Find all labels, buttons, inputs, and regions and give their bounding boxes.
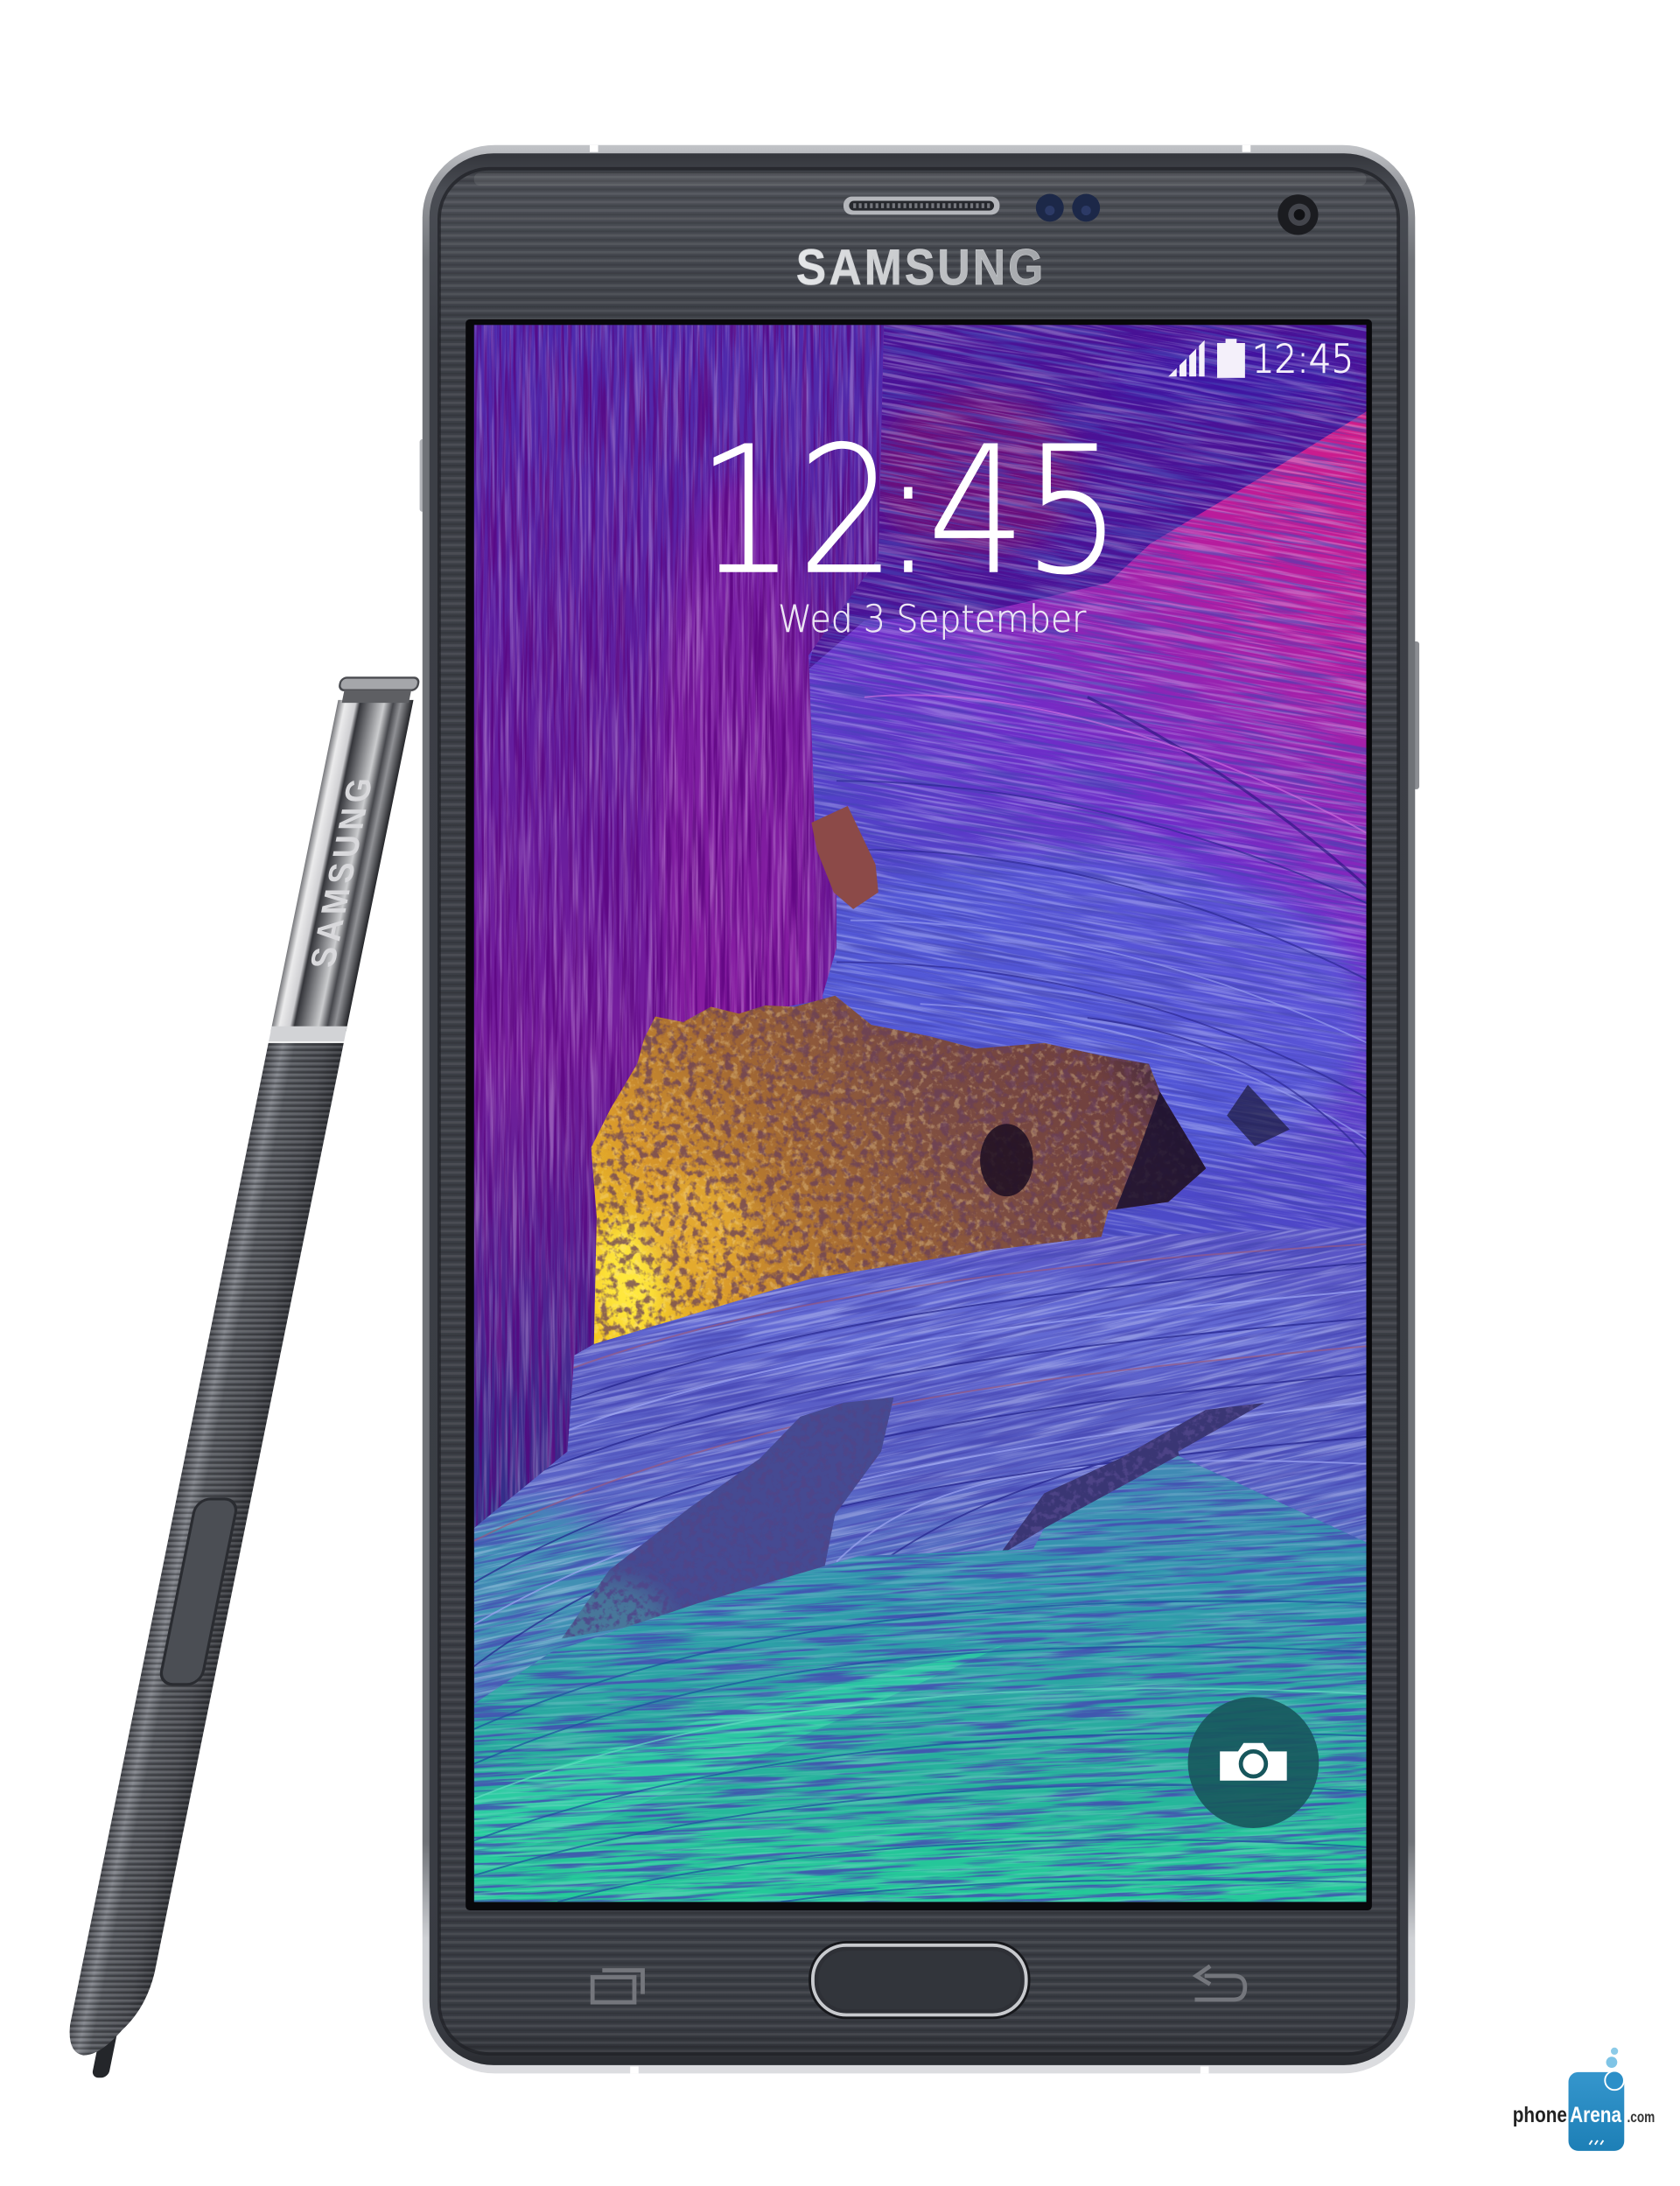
pen rib texture	[62, 1043, 344, 2056]
earpiece speaker	[844, 197, 999, 214]
pen grip body	[62, 1043, 344, 2056]
purple fibre column	[460, 314, 906, 1541]
home button	[808, 1941, 1030, 2019]
blue feather swirl	[474, 1227, 1367, 1704]
display bezel	[466, 319, 1372, 1910]
side buttons	[420, 439, 1419, 789]
logo word Arena: Arena	[1570, 2104, 1621, 2127]
wallpaper base	[474, 325, 1366, 1902]
logo word phone: phone	[1513, 2104, 1567, 2127]
front camera	[1278, 194, 1319, 235]
S Pen stylus	[57, 677, 419, 2077]
phone: Samsung Galaxy Note 4	[302, 145, 1680, 2073]
pen chrome collar	[269, 1026, 347, 1041]
pen top cap	[336, 677, 419, 703]
glass stripe texture	[435, 172, 1403, 2054]
status bar: signal icon	[1168, 340, 1205, 376]
fibre strokes	[474, 1244, 1373, 1666]
back key	[1195, 1966, 1245, 2000]
logo .com: .com	[1627, 2108, 1655, 2126]
fibre strokes	[836, 695, 1373, 1165]
gold foil crumple	[592, 996, 1206, 1344]
pen SAMSUNG engraving: SAMSUNG	[303, 778, 381, 968]
pen chrome barrel	[270, 700, 414, 1032]
proximity sensors	[1036, 193, 1100, 221]
magenta and violet sweep	[808, 325, 1367, 1241]
phoneArena logo	[1513, 2048, 1655, 2151]
logo keypad marks	[1589, 2140, 1603, 2145]
front glass body	[430, 153, 1408, 2065]
lock screen date: Wed 3 September	[778, 598, 1087, 641]
status bar: battery icon	[1217, 339, 1245, 378]
recent apps key	[592, 1970, 643, 2002]
logo bubbles	[1605, 2048, 1624, 2090]
dark crag right of gold	[1227, 1085, 1290, 1146]
fibre strokes	[474, 1601, 1373, 1902]
SAMSUNG logo: SAMSUNG	[796, 240, 1043, 296]
camera shortcut	[1188, 1697, 1319, 1828]
metal frame	[423, 145, 1415, 2073]
frame notches	[590, 145, 1250, 2073]
dark crag right	[1003, 1403, 1264, 1551]
pen nib	[91, 2021, 120, 2077]
glass edge line	[439, 169, 1398, 2054]
logo phone shape	[1569, 2072, 1624, 2151]
orange patch at fold	[811, 806, 878, 909]
teal feather field	[474, 1456, 1367, 1902]
status bar: time: 12:45	[1252, 336, 1354, 382]
dark crag centre	[562, 1397, 894, 1638]
glass top highlight	[474, 173, 1366, 186]
pen side button	[159, 1499, 238, 1685]
lock screen wallpaper	[474, 325, 1367, 1902]
lock screen clock: 12:45	[696, 408, 1122, 613]
